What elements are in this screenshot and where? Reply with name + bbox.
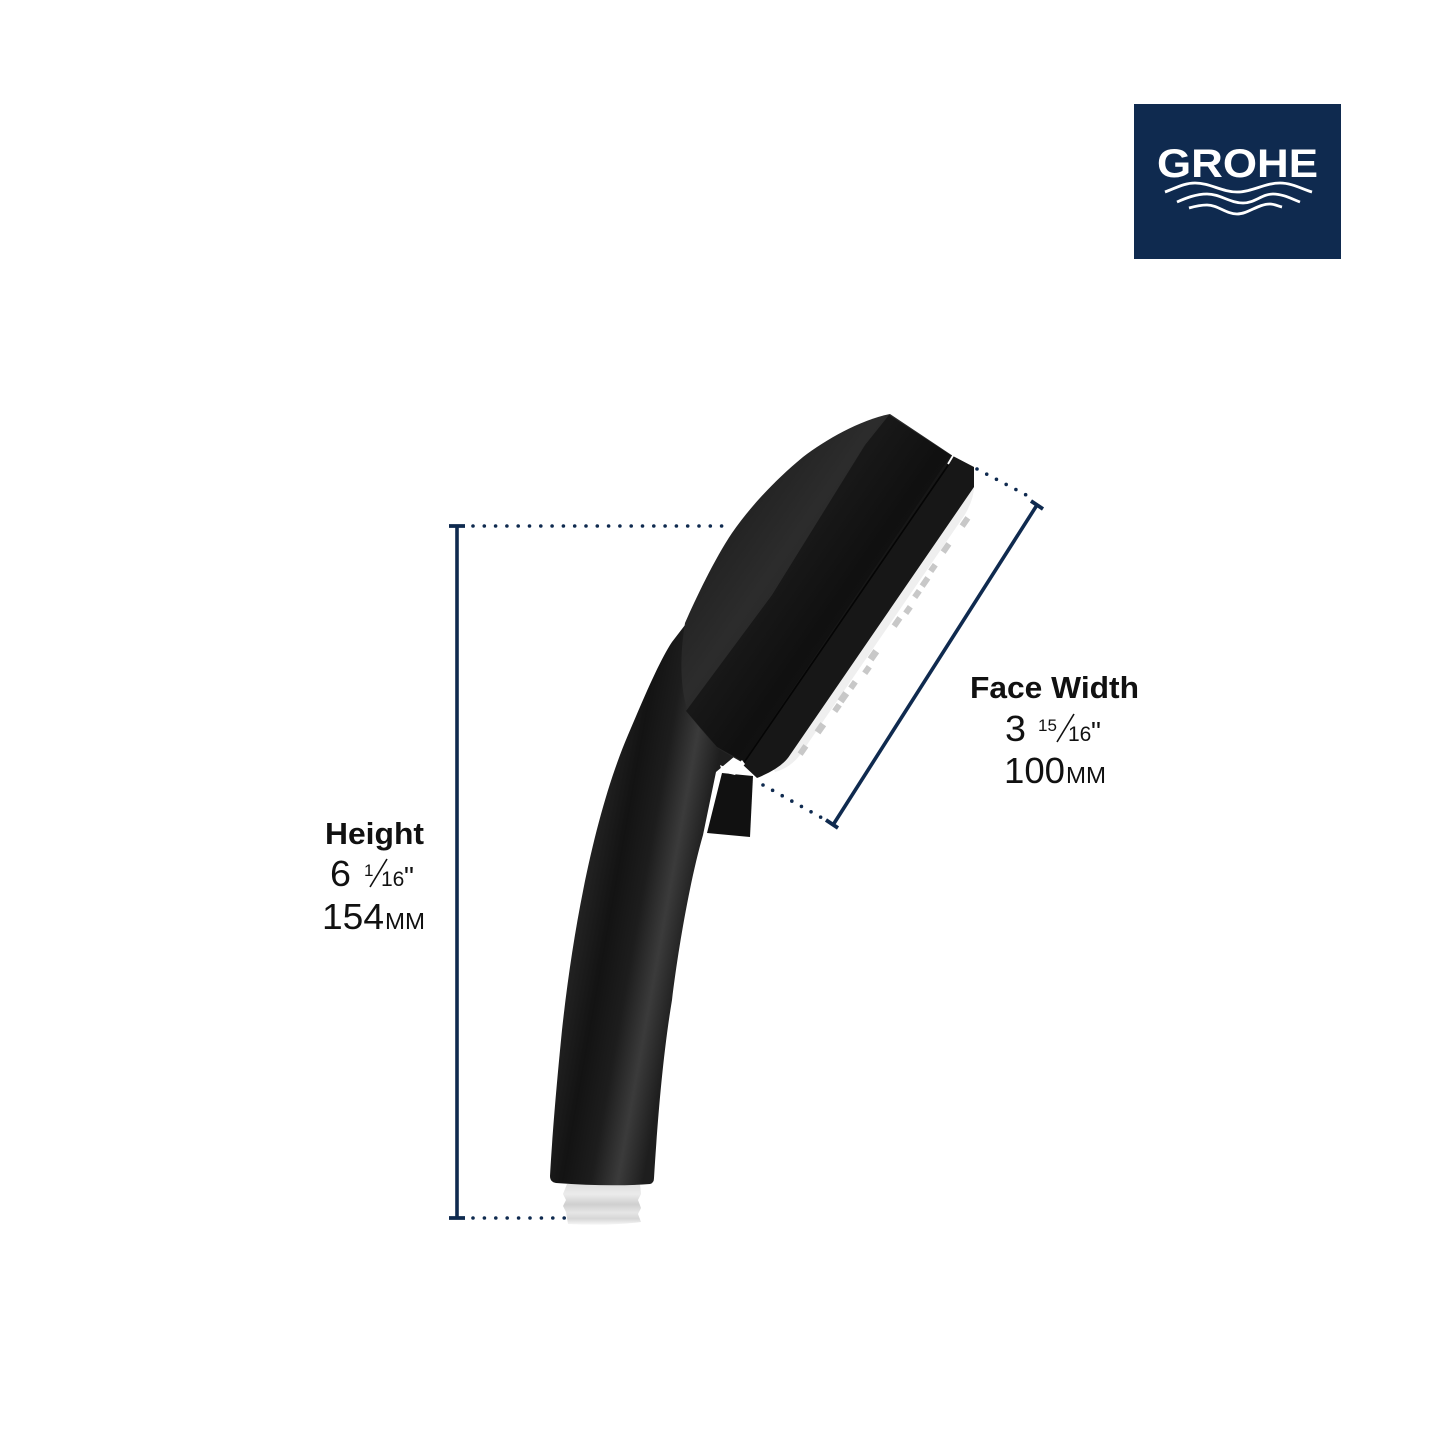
- label: height: Height: [325, 816, 424, 851]
- thread connector: [563, 1184, 641, 1225]
- head dark facet: [686, 415, 952, 762]
- label: face width: 16: [1068, 723, 1091, 746]
- dimension: height: [449, 526, 732, 1218]
- label: face width: 100: [1004, 750, 1065, 791]
- logo: GROHE: [1134, 104, 1341, 259]
- head shell: [681, 414, 953, 764]
- label: height: 6: [330, 853, 351, 894]
- label: face width: [970, 670, 1139, 791]
- seam line: [743, 464, 949, 764]
- label: height: [322, 816, 425, 937]
- spray face: [770, 485, 974, 772]
- label: height: 16: [381, 868, 404, 891]
- dimension: face width: [763, 469, 1043, 828]
- label: face width: 15: [1038, 716, 1057, 735]
- label: height: MM: [385, 908, 425, 934]
- bottom notch: [720, 760, 745, 775]
- face ring: [742, 455, 974, 778]
- label: face width: MM: [1066, 762, 1106, 788]
- logo: GROHE: GROHE: [1157, 142, 1318, 186]
- label: height: 154: [322, 896, 384, 937]
- top notch: [948, 454, 954, 464]
- label: height: ": [404, 861, 414, 892]
- trigger button: [707, 773, 753, 837]
- product: hand shower: [550, 414, 974, 1225]
- label: face width: 3: [1005, 708, 1026, 749]
- handle: [550, 612, 735, 1185]
- label: height: 1: [364, 861, 373, 880]
- label: face width: ": [1091, 716, 1101, 747]
- label: face width: Face Width: [970, 670, 1139, 705]
